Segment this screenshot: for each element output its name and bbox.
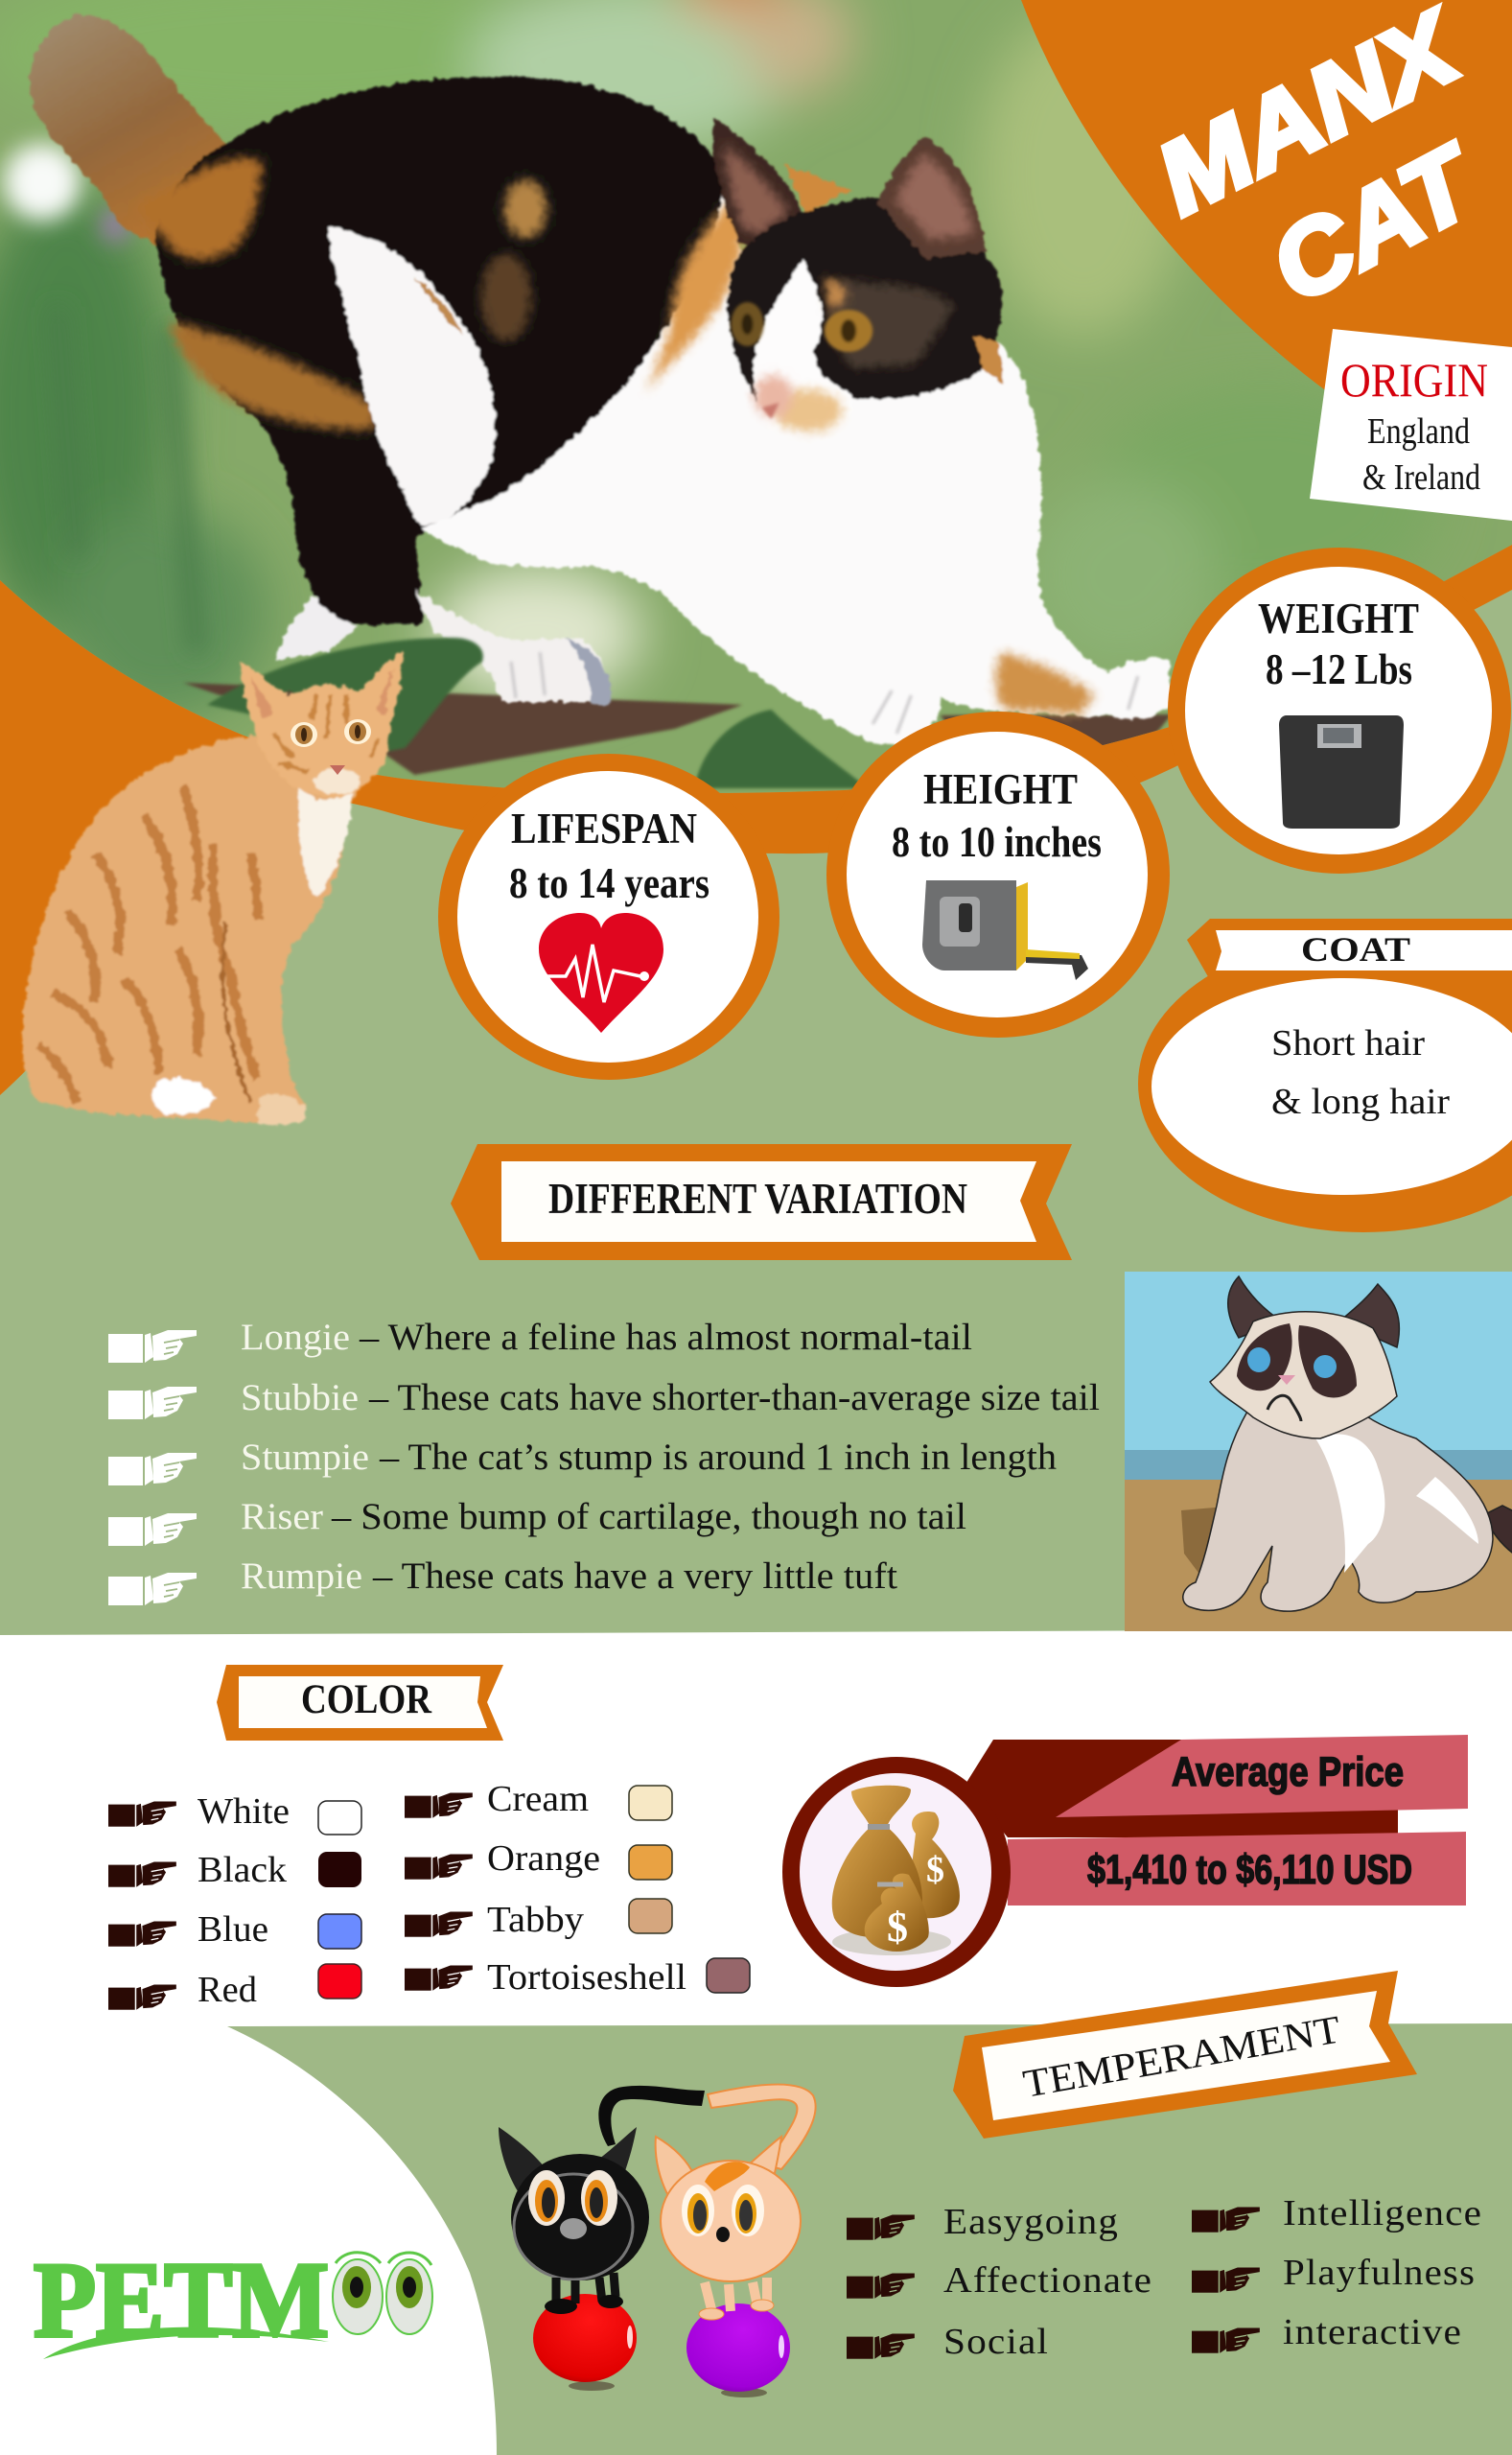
ginger cat: [22, 650, 403, 1125]
photo: calico cat on a log: [0, 0, 1512, 806]
circle: weight: WEIGHT: [1258, 595, 1419, 643]
icon: money bags in a circle: [782, 1757, 1011, 1987]
list: tail variations: [108, 1317, 1100, 1605]
circle: height: [826, 712, 1170, 1038]
list: temperament traits: Playfulness: [1283, 2253, 1476, 2293]
banner: color: [217, 1665, 503, 1741]
list: temperament traits: Intelligence: [1283, 2193, 1482, 2233]
logo: PetMoo: PETM: [34, 2241, 329, 2360]
list: tail variations: Stumpie: [241, 1437, 369, 1478]
list: temperament traits: Easygoing: [943, 2202, 1119, 2242]
colour list: Orange: [487, 1838, 600, 1879]
orange title corner: [1021, 0, 1512, 479]
list: tail variations: – These cats have a very little tuft: [372, 1555, 897, 1597]
purple ball: [686, 2303, 790, 2397]
list: temperament traits: Social: [943, 2322, 1049, 2362]
circle: lifespan: LIFESPAN: [511, 805, 697, 853]
cat eyes, nose and toe lines: [511, 302, 1138, 734]
coat panel: [1138, 919, 1512, 1232]
log: [183, 683, 1172, 775]
title: MANX: [1140, 0, 1479, 236]
list: tail variations: – These cats have shorter-than-average size tail: [368, 1377, 1100, 1418]
average price ribbon: [965, 1735, 1468, 1906]
list: tail variations: Stubbie: [241, 1377, 359, 1418]
orange cat: [656, 2085, 816, 2320]
title: CAT: [1253, 123, 1499, 324]
ginger cat face: [291, 719, 371, 775]
colour list: Tortoiseshell: [487, 1957, 686, 1998]
origin card: ORIGIN: [1340, 353, 1488, 407]
list: tail variations: – Where a feline has almost normal-tail: [359, 1317, 972, 1358]
list: tail variations: – Some bump of cartilage, though no tail: [331, 1496, 966, 1537]
origin card: England: [1367, 411, 1470, 452]
title: [1140, 0, 1499, 324]
icon: money bags in a circle: $: [926, 1850, 944, 1890]
lower green panel beside white corner: [227, 2023, 1512, 2455]
icon: heart with pulse: [539, 913, 663, 1033]
origin card: & Ireland: [1362, 457, 1480, 498]
icon: money bags in a circle: $: [887, 1904, 908, 1951]
white lower section: [0, 1629, 1512, 2455]
list: temperament traits: interactive: [1283, 2312, 1462, 2352]
black cat: [499, 2086, 705, 2314]
list: tail variations: Longie: [241, 1317, 350, 1358]
circle: weight: 8 –12 Lbs: [1266, 645, 1412, 693]
banner: color: COLOR: [301, 1677, 432, 1722]
circle: lifespan: [438, 754, 779, 1080]
orange curved band linking the stat circles: [0, 545, 1512, 1095]
banner: different variation: [451, 1144, 1072, 1260]
coat panel: Short hair: [1271, 1023, 1425, 1064]
colour list: Red: [198, 1970, 257, 2010]
circle: lifespan: 8 to 14 years: [509, 859, 709, 907]
coat panel: & long hair: [1271, 1082, 1450, 1122]
leaves: [207, 638, 868, 788]
banner: temperament: TEMPERAMENT: [1020, 2006, 1343, 2106]
red ball: [533, 2294, 637, 2391]
list: temperament traits: [847, 2193, 1482, 2362]
colour list: Blue: [198, 1909, 268, 1950]
banner: different variation: DIFFERENT VARIATION: [548, 1175, 967, 1223]
colour list: Cream: [487, 1779, 589, 1819]
banner: temperament: [953, 1971, 1417, 2139]
icon: tape measure: [922, 880, 1088, 980]
colour list: Tabby: [487, 1900, 584, 1940]
illustration: two cartoon cats on balls: [499, 2085, 816, 2397]
circle: height: HEIGHT: [923, 765, 1078, 813]
colour list: Black: [198, 1850, 287, 1890]
list: tail variations: Rumpie: [241, 1555, 362, 1597]
coat panel: COAT: [1301, 930, 1410, 969]
illustration: grumpy cat: [1125, 1272, 1512, 1631]
circle: height: 8 to 10 inches: [892, 818, 1102, 866]
circle: weight: [1168, 548, 1511, 874]
colour list: White: [198, 1791, 290, 1832]
colour list: [108, 1779, 750, 2010]
list: temperament traits: Affectionate: [943, 2260, 1152, 2301]
average price ribbon: Average Price: [1172, 1749, 1404, 1795]
average price ribbon: $1,410 to $6,110 USD: [1087, 1847, 1412, 1893]
icon: bathroom scale: [1279, 715, 1404, 829]
origin card: [1310, 329, 1512, 521]
list: tail variations: Riser: [241, 1496, 323, 1537]
list: tail variations: – The cat’s stump is around 1 inch in length: [379, 1437, 1057, 1478]
